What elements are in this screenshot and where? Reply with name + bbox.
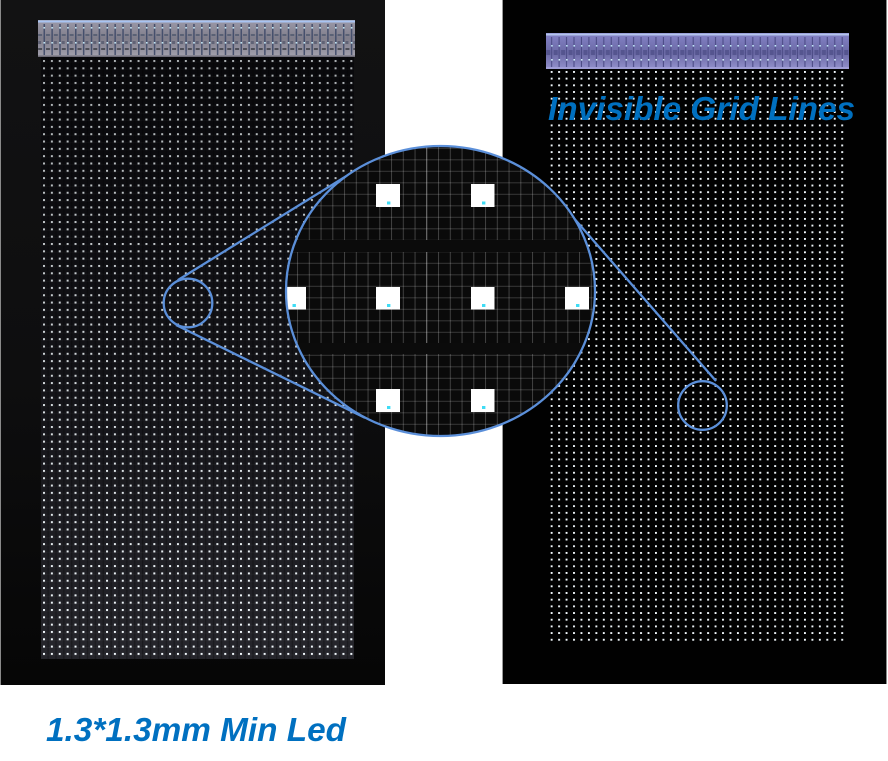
right driver header bar bbox=[546, 33, 849, 69]
left driver header bar bbox=[38, 20, 355, 57]
marker circle on left panel bbox=[164, 279, 212, 327]
panel: right LED screen with invisible grid lines bbox=[502, 0, 887, 684]
panel: left LED screen with visible grid lines bbox=[0, 0, 385, 685]
magnifier: enlarged pixels and grid lines bbox=[286, 146, 595, 436]
heading: Invisible Grid Lines: Invisible Grid Lines bbox=[548, 91, 855, 128]
callout line: left circle to magnifier top bbox=[178, 168, 360, 280]
LED squares bbox=[286, 184, 589, 412]
callout line: right circle to magnifier bbox=[570, 214, 716, 381]
cyan LED chips bbox=[292, 202, 579, 409]
marker circle on right panel bbox=[678, 381, 727, 430]
caption: 1.3*1.3mm Min Led: 1.3*1.3mm Min Led bbox=[46, 712, 348, 749]
left LED dot matrix bbox=[41, 57, 354, 659]
callout line: left circle to magnifier bottom bbox=[176, 325, 365, 418]
right LED dot matrix bbox=[550, 71, 846, 642]
